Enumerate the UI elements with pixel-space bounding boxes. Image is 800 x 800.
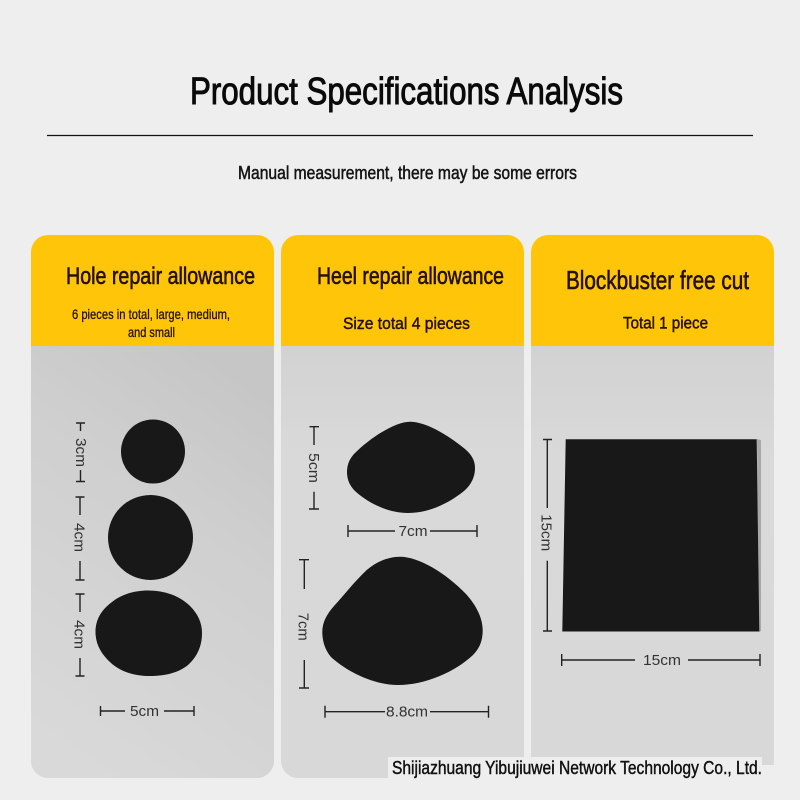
dimension: 15cm height (538, 440, 554, 631)
large oval patch (96, 590, 202, 676)
dimension: 5cm (100, 703, 194, 720)
panel: blockbuster free cut (531, 235, 774, 778)
panel 1 body (31, 235, 274, 778)
panel 2 description: Size total 4 pieces (343, 314, 470, 333)
panel 2 heading: Heel repair allowance (317, 263, 504, 290)
dimension: 15cm width: 15cm (643, 652, 681, 669)
dimension: 4cm medium (70, 497, 88, 580)
large heel patch (322, 557, 483, 685)
dimension: 8.8cm: 8.8cm (386, 704, 428, 721)
panel 3 body (531, 235, 774, 778)
panel: hole repair allowance (31, 235, 274, 778)
dimension: 7cm height: 7cm (294, 613, 312, 641)
panel 1 description (72, 306, 230, 340)
dimension: 15cm height: 15cm (538, 514, 554, 551)
dimension: 8.8cm (325, 704, 488, 721)
panel 1 heading: Hole repair allowance (66, 263, 255, 290)
panel: heel repair allowance (281, 235, 524, 778)
dimension: 5cm: 5cm (130, 703, 159, 720)
dimension: 7cm width (348, 523, 477, 540)
dimension: 4cm large: 4cm (70, 620, 88, 649)
panel 1 description: 6 pieces in total, large, medium, (72, 306, 230, 322)
panel 2 body (281, 235, 524, 778)
dimension: 15cm width (562, 652, 760, 669)
dimension: 7cm width: 7cm (398, 523, 428, 540)
subtitle: Manual measurement, there may be some errors (238, 163, 577, 183)
small heel patch (347, 422, 475, 513)
panel 3 description: Total 1 piece (623, 314, 708, 332)
dimension: 7cm height (294, 560, 312, 688)
dimension: 4cm medium: 4cm (70, 523, 88, 552)
medium round patch (108, 495, 193, 580)
small round patch (121, 420, 185, 484)
panel 3 heading: Blockbuster free cut (566, 265, 750, 295)
dimension: 5cm height (305, 427, 322, 509)
dimension: 3cm: 3cm (72, 438, 89, 467)
title: Product Specifications Analysis (190, 71, 623, 113)
panel 1 description: and small (128, 324, 175, 340)
square patch (562, 439, 761, 632)
dimension: 4cm large (70, 594, 88, 676)
dimension: 5cm height: 5cm (305, 453, 322, 483)
dimension: 3cm (72, 423, 89, 482)
